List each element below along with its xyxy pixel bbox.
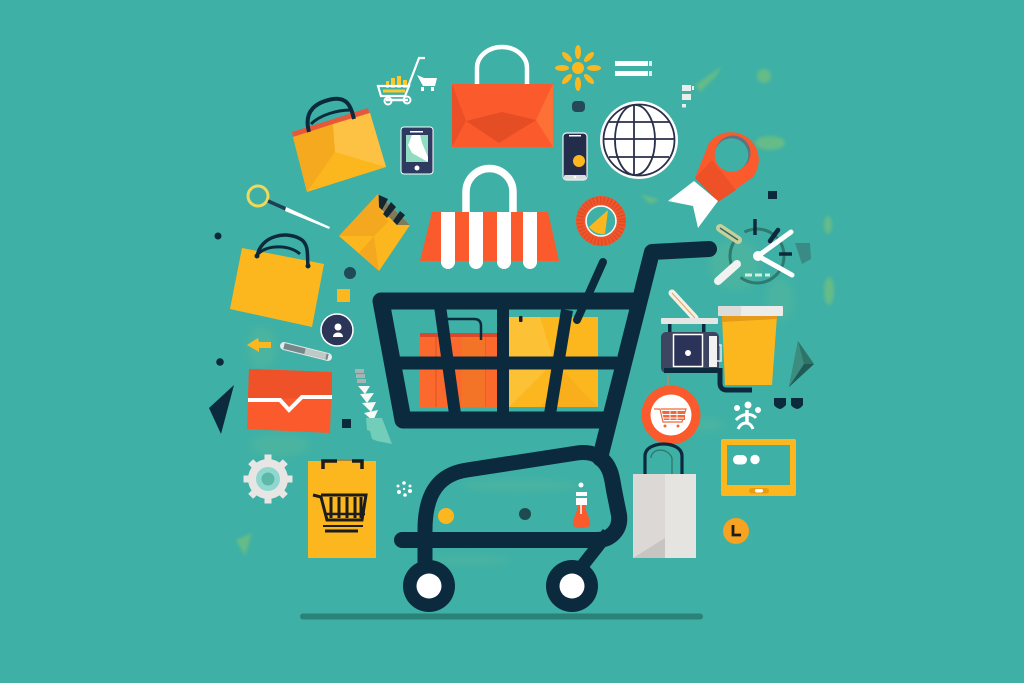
icon: flask [573,482,590,528]
cart diagonal brace [577,262,603,320]
icon: white paper bag [633,444,696,558]
icon: grey pill [284,346,328,357]
icon: dark square small [342,419,351,428]
icon: location pin [668,132,759,228]
icon: dark triangle left [209,385,234,434]
icon: white dot cluster [396,481,412,497]
ground shadow [300,614,703,620]
icon: left yellow shopping bag [230,235,324,327]
cart grid bars [400,306,617,414]
icon: spine ornament [355,371,392,444]
icon: yellow tablet [721,439,796,496]
icon: orange compass badge [576,196,626,246]
icon: tilted yellow shopping bag [292,99,386,192]
bag in cart: orange [420,319,497,407]
icon: sun [555,45,601,91]
icon: user badge [321,314,353,346]
icon: small white squares [682,85,694,108]
icon: two dark shields [774,398,803,409]
cart basket [381,301,638,420]
decor: dots inside cart frame [438,508,531,524]
icon: magnifier [248,186,330,229]
icon: globe [600,101,678,179]
icon: dark triangle right [789,341,814,387]
icon: small white carts [378,58,437,104]
icon: dark rounded tile [572,101,585,112]
icon: dark square [768,191,777,199]
icon: orange cart badge [642,375,700,444]
cart handle [600,249,709,458]
icon: yellow card with cart [308,460,376,558]
icon: menu lines [615,61,652,76]
decor: dots and square [214,232,356,366]
icon: clock with tools [718,219,811,283]
icon: yellow cup [718,306,783,385]
watercolor smudges [236,66,834,565]
icon: gear [244,454,292,504]
icon: phone with mint screen [401,127,433,174]
icon: small orange clock [723,518,749,544]
icon: dark phone [563,133,587,180]
icon: camera device [661,293,752,390]
bag in cart: yellow [509,316,598,407]
icon: striped shopping bag [420,168,559,269]
shopping cart [381,249,709,575]
icon: people symbol [734,402,761,429]
cart lower frame [425,453,600,575]
icon: orange handbag [452,47,553,147]
icon: folded yellow box [339,194,410,271]
icon: yellow left arrow [247,338,271,352]
icon: red envelope [247,369,332,433]
cart wheels [403,560,598,612]
